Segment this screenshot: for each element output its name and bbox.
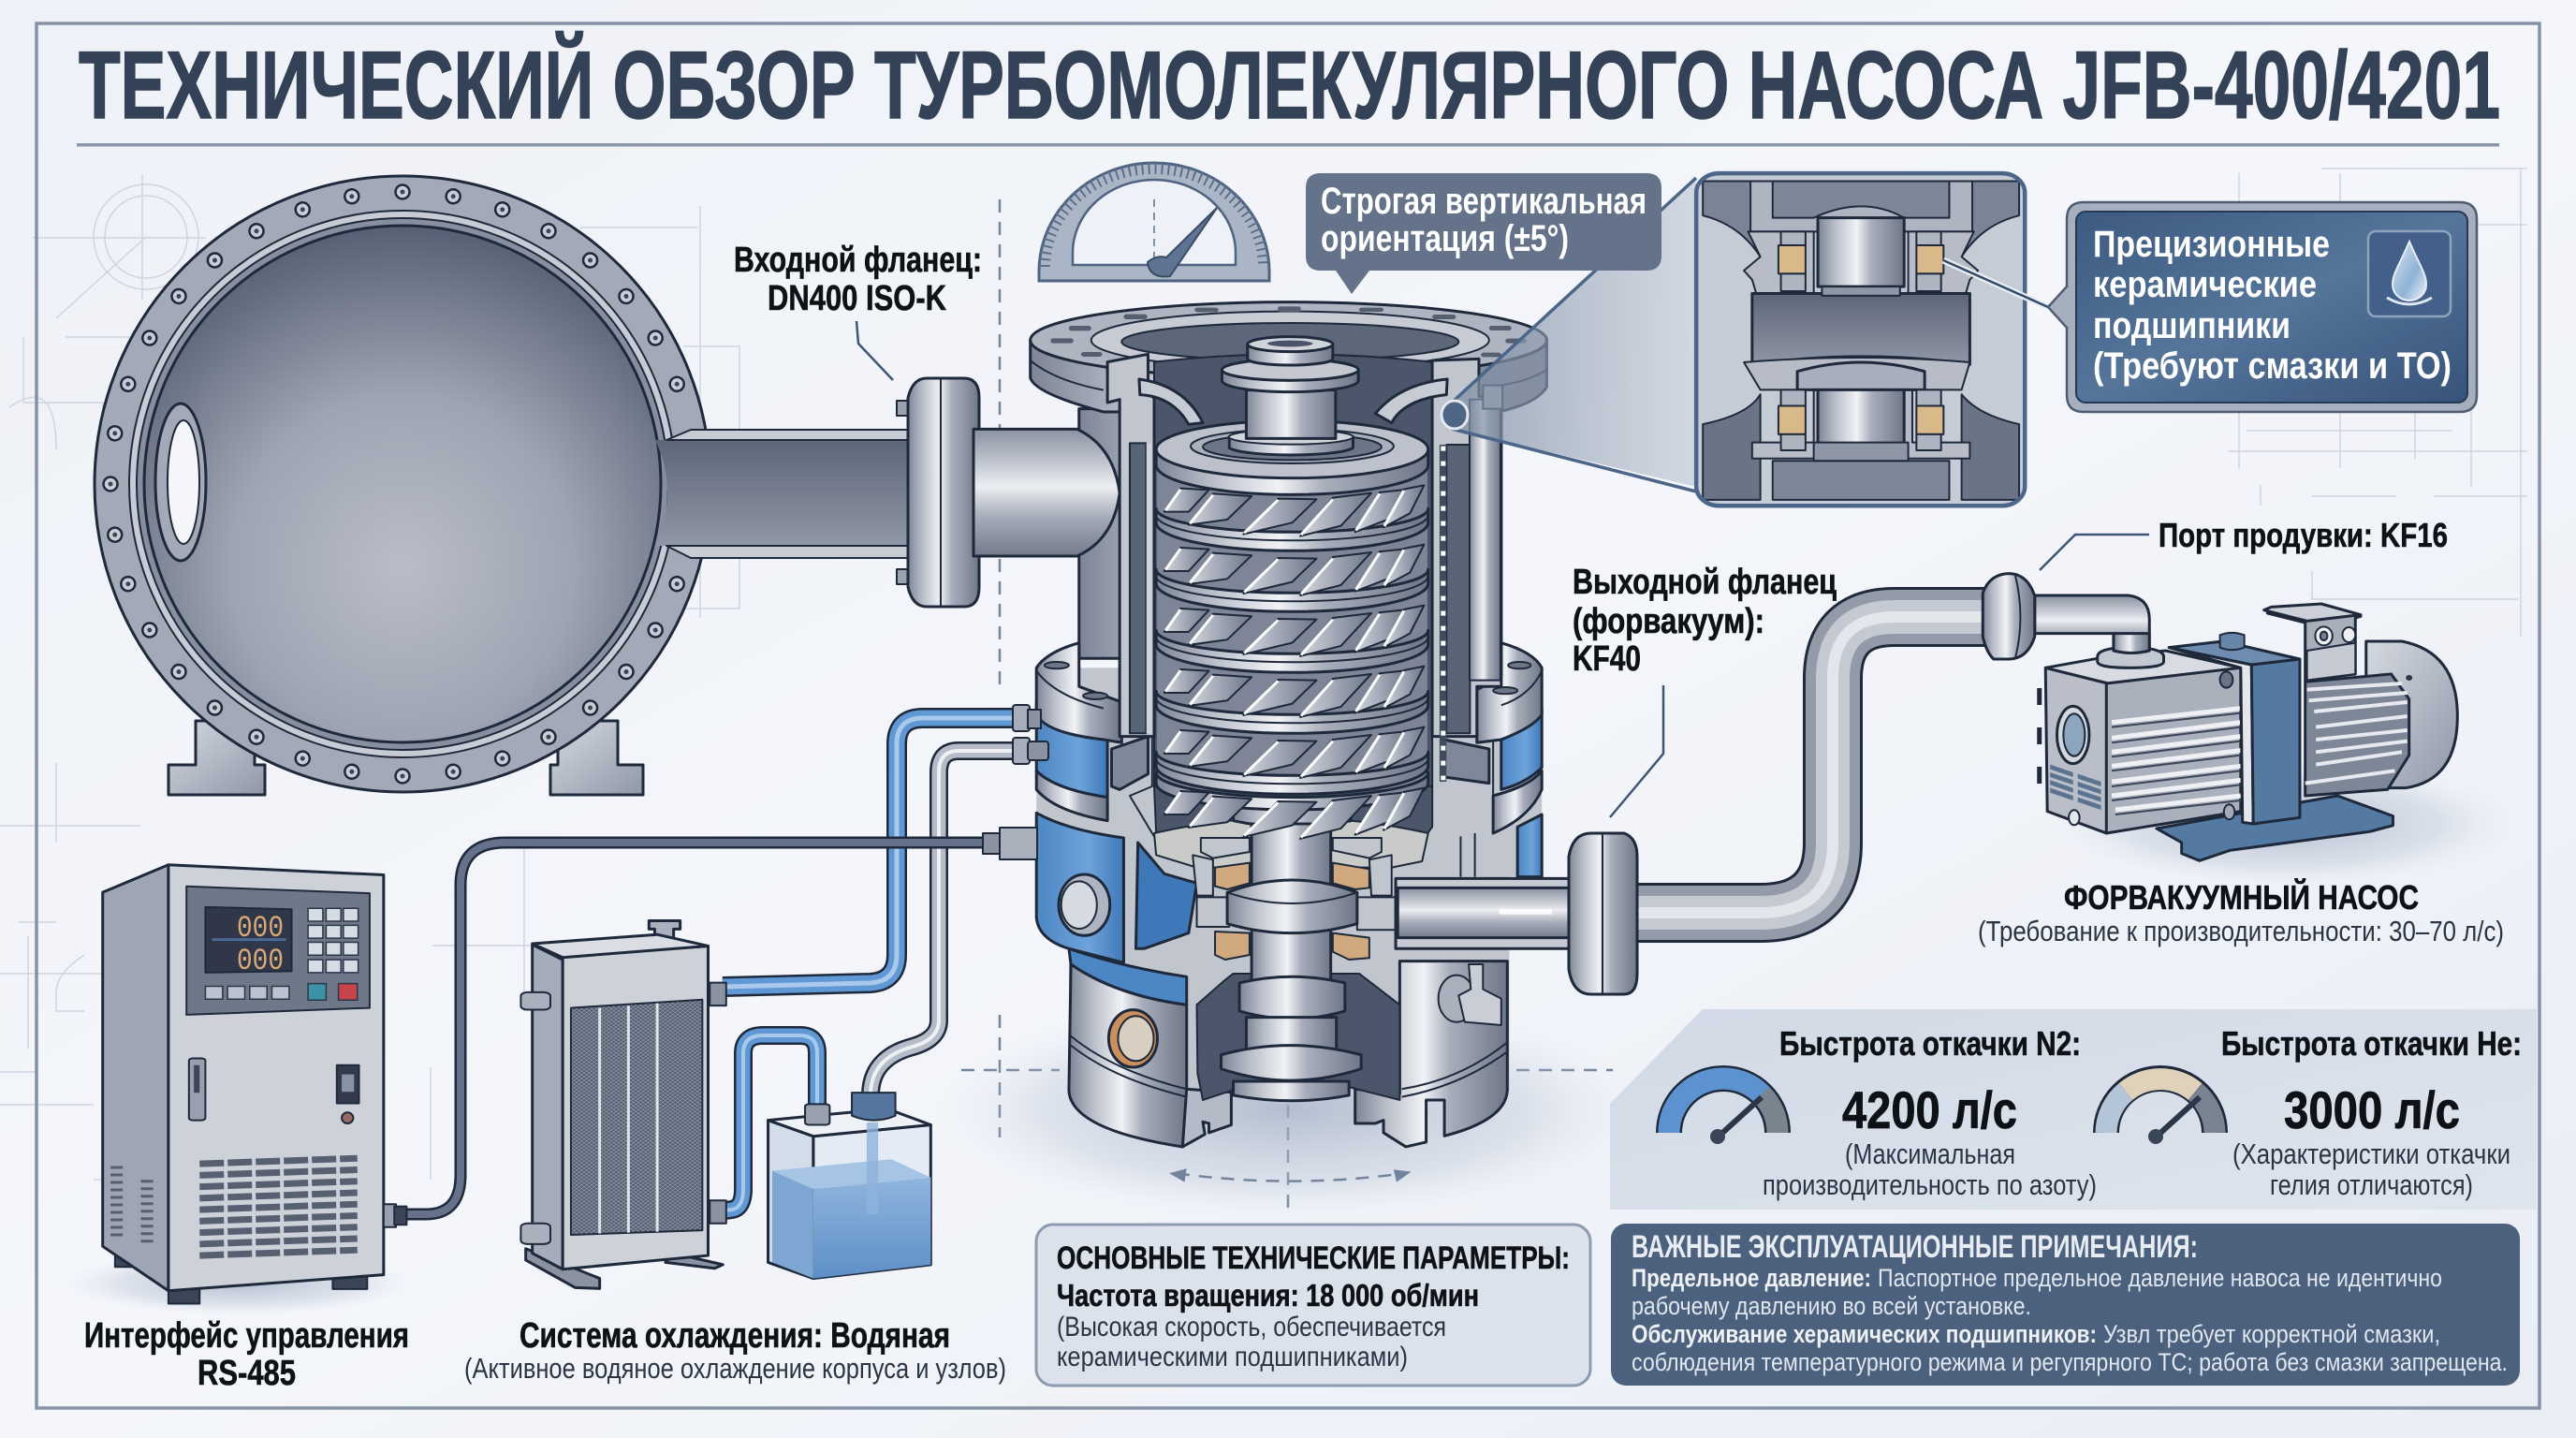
inner blue coolant volume (1135, 843, 1197, 948)
vent slots (2050, 765, 2101, 810)
sight glass (1108, 1010, 1157, 1067)
rotor stages (1156, 420, 1428, 839)
helium value: 3000 л/с (2284, 1080, 2460, 1139)
lower cavity (1154, 786, 1432, 1100)
helium note: гелия отличаются) (2270, 1168, 2473, 1201)
wall seal blocks (1111, 737, 1489, 789)
drain valve (1439, 964, 1501, 1025)
outlet flange front (1569, 833, 1637, 994)
outlet flange label: KF40 (1573, 639, 1641, 679)
panel: technical parameters: ОСНОВНЫЕ ТЕХНИЧЕСКИЕ ПАРАМЕТРЫ: (1057, 1240, 1570, 1276)
lower pump section (1036, 668, 1585, 1147)
right housing wall section (1432, 359, 1502, 782)
cable gland (384, 1204, 406, 1227)
panel: operating notes: рабочему давлению во всей установке. (1632, 1292, 2031, 1320)
panel: operating notes: Обслуживание херамических подшипников: (1632, 1320, 2097, 1348)
nitrogen value: 4200 л/с (1842, 1080, 2017, 1139)
cooling label (464, 1316, 1006, 1385)
protractor needle (1148, 208, 1217, 276)
dip tube (867, 1123, 878, 1214)
radiator cap (649, 921, 681, 944)
display digits (237, 911, 284, 978)
door handle (189, 1058, 205, 1121)
radiator side (533, 945, 563, 1269)
cabinet front (168, 865, 384, 1291)
left housing wall section (1107, 354, 1154, 737)
top flange (1031, 302, 1546, 412)
control panel (186, 887, 370, 1015)
panel: technical parameters: (Высокая скорость, обеспечивается (1057, 1312, 1446, 1343)
outlet flange label: (форвакуум): (1573, 602, 1764, 641)
panel: technical parameters (1036, 1225, 1590, 1386)
cabinet side (103, 865, 168, 1291)
coolant pipes (402, 705, 1048, 1214)
blue band (2169, 633, 2300, 824)
cabinet shadow (66, 1251, 411, 1315)
display digits: 000 (237, 944, 284, 978)
centre lines (961, 199, 1613, 1213)
pump interior cavity (1154, 354, 1432, 786)
feet (115, 1251, 367, 1303)
panel: operating notes (1611, 1224, 2520, 1386)
helium note: (Характеристики откачки (2232, 1137, 2510, 1170)
inlet flange label: Входной фланец: (734, 241, 982, 280)
window on side (2056, 706, 2089, 764)
purge port label: Порт продувки: KF16 (2159, 516, 2448, 554)
controller label: Интерфейс управления (84, 1316, 409, 1356)
outlet flange label: Выходной фланец (1573, 563, 1837, 602)
bearing detail inset (1696, 173, 2025, 506)
keypad (205, 908, 359, 1000)
protractor level indicator (1039, 163, 1269, 281)
panel: operating notes: Паспортное предельное давление навоса не идентично (1878, 1264, 2442, 1292)
tank glass (813, 1124, 930, 1279)
nitrogen gauge (1669, 1078, 1778, 1144)
panel: operating notes: Узвл требует корректной смазки, (2103, 1320, 2440, 1348)
outlet flange leader (1610, 685, 1663, 817)
lower body backing (1036, 668, 1542, 1091)
backing vacuum pump (1983, 574, 2509, 885)
vertical orientation callout (1306, 173, 1661, 294)
side vents (117, 1167, 147, 1246)
title divider (77, 143, 2499, 146)
water (772, 1159, 930, 1279)
grey return pipe (871, 751, 1018, 1105)
blue tank loop (710, 1035, 817, 1212)
upper housing tube (1079, 409, 1501, 658)
foreline pipe (1569, 617, 1998, 994)
rotor shaft top (1222, 337, 1358, 455)
bearing callout: (Требуют смазки и ТО) (2093, 345, 2452, 387)
helium note (2232, 1137, 2510, 1201)
upper bearing (1703, 181, 2019, 500)
nitrogen speed heading: Быстрота откачки N2: (1779, 1024, 2081, 1063)
flange bolts (103, 185, 686, 783)
chamber flange (95, 176, 710, 792)
panel: technical parameters: керамическими подшипниками) (1057, 1342, 1408, 1372)
callout pointer line (1943, 260, 2048, 307)
rotor shaft lower (1222, 805, 1361, 1101)
inlet flange label: DN400 ISO-K (768, 279, 946, 318)
lower flange (1036, 643, 1121, 742)
bearing shaft (1797, 218, 1925, 461)
faint blueprint drawings (0, 169, 2527, 1180)
blue supply pipe (723, 718, 1016, 987)
oil box left face (2045, 668, 2114, 833)
vertical orientation callout: Строгая вертикальная (1321, 181, 1647, 222)
bearing callout: Прецизионные (2093, 224, 2330, 265)
bolts (2069, 671, 2234, 825)
side fins (2037, 688, 2042, 789)
purge elbow and flange (1983, 574, 2149, 659)
controller label: RS-485 (198, 1354, 296, 1393)
vertical orientation callout: ориентация (±5°) (1321, 218, 1569, 259)
backing pump label: ФОРВАКУУМНЫЙ НАСОС (2064, 877, 2419, 917)
turbomolecular pump main body (942, 302, 1634, 1217)
outlet tube (1396, 878, 1585, 948)
ceramic elements (1778, 231, 1943, 450)
inlet flange label (734, 241, 982, 318)
controller label (84, 1316, 409, 1393)
coolant tank (768, 1093, 930, 1279)
panel: operating notes: Предельное давление: (1632, 1264, 1871, 1292)
radiator front (563, 946, 708, 1269)
display digits: 000 (237, 911, 284, 946)
motor (2305, 641, 2457, 796)
bearing callout: керамические (2093, 264, 2317, 305)
lower bearing (1744, 358, 1969, 500)
bearing callout: подшипники (2093, 305, 2291, 346)
helium gauge (2106, 1078, 2215, 1144)
separator plate (2169, 648, 2253, 824)
pipe connectors (983, 705, 1048, 859)
vacuum chamber (95, 176, 979, 795)
signal cable (402, 843, 992, 1214)
connecting pipe (655, 430, 910, 558)
tank fittings (805, 1093, 896, 1124)
radiator top (533, 934, 708, 958)
radiator core (571, 1000, 702, 1235)
radiator ports (520, 983, 726, 1244)
side viewport (155, 404, 206, 561)
rotor core (1157, 456, 1427, 789)
knob on jacket (1059, 874, 1110, 935)
port on top (2098, 648, 2164, 668)
lower metal housing (1069, 961, 1507, 1147)
oil box fins face (2106, 668, 2241, 833)
outlet flange label (1573, 563, 1837, 679)
cooling label: Система охлаждения: Водяная (520, 1316, 950, 1356)
section outlines (1123, 730, 1493, 948)
inlet flange (897, 378, 979, 607)
bearing callout (1943, 202, 2477, 412)
pump base (2157, 796, 2393, 860)
central housing (1752, 293, 1969, 364)
nitrogen note (1763, 1137, 2097, 1201)
inlet flange leader (856, 321, 893, 380)
cooling radiator (520, 921, 726, 1288)
rotation arrow (1169, 1168, 1412, 1182)
chamber bore (144, 226, 661, 742)
nitrogen note: производительность по азоту) (1763, 1168, 2097, 1201)
purge port leader (2040, 535, 2149, 570)
panel: operating notes: ВАЖНЫЕ ЭКСПЛУАТАЦИОННЫЕ ПРИМЕЧАНИЯ: (1632, 1229, 2198, 1265)
nitrogen note: (Максимальная (1845, 1137, 2015, 1170)
icon: oil droplet (2368, 231, 2451, 316)
helium speed heading: Быстрота откачки Не: (2221, 1024, 2522, 1063)
curved inner baffles (1139, 379, 1447, 424)
panel: pumping speed (1610, 1009, 2537, 1210)
bottom skirt section left (1182, 1089, 1231, 1147)
switch (337, 1065, 359, 1123)
panel: technical parameters: Частота вращения: 18 000 об/мин (1057, 1278, 1479, 1313)
blue cooling jacket (1036, 702, 1542, 1005)
display screen (205, 907, 292, 973)
tank top (768, 1108, 930, 1137)
chamber support stands (168, 721, 643, 795)
terminal box (2264, 604, 2361, 681)
inlet tube (973, 429, 1120, 556)
oil box top (2045, 651, 2241, 683)
bearing cages (1193, 838, 1396, 960)
zoom cone to bearing detail (1442, 178, 1696, 492)
front vents (199, 1158, 358, 1255)
pump shadow (2059, 763, 2509, 885)
flange bolt slots (1050, 306, 1527, 357)
cooling label: (Активное водяное охлаждение корпуса и узлов) (464, 1352, 1006, 1385)
radiator feet (526, 1249, 723, 1288)
pump floor shadow (942, 1002, 1634, 1217)
controller cabinet (66, 865, 411, 1315)
upper pump section (973, 302, 1546, 839)
